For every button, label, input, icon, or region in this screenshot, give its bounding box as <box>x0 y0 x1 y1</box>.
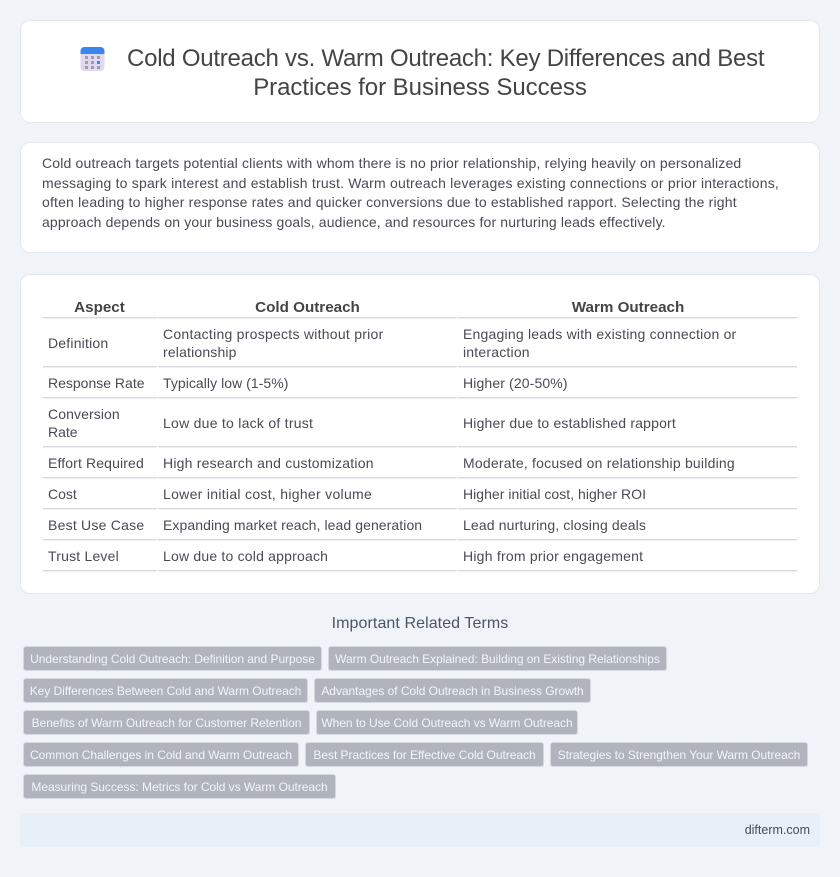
row: trust level: High from prior engagement <box>463 548 643 564</box>
row: best use case <box>48 517 646 533</box>
row: effort required: Effort Required <box>48 455 144 471</box>
panel: introduction <box>20 142 820 253</box>
row: conversion rate <box>48 406 676 440</box>
row: trust level <box>48 548 643 564</box>
row: conversion rate: Higher due to established rapport <box>463 415 676 431</box>
row: definition <box>48 326 736 360</box>
panel: header <box>20 20 820 123</box>
row: response rate: Higher (20-50%) <box>463 375 568 391</box>
intro text: Cold outreach targets potential clients with whom there is no prior relationship, relying heavily on personalized <box>42 155 741 171</box>
row: conversion rate: Low due to lack of trust <box>163 415 313 431</box>
chip <box>316 710 578 735</box>
row: conversion rate: Conversion <box>48 406 120 422</box>
chip <box>23 678 308 703</box>
row: best use case: Expanding market reach, lead generation <box>163 517 422 533</box>
heading: related terms: Important Related Terms <box>332 615 508 632</box>
panel: related term chips <box>23 646 808 799</box>
row: effort required: Moderate, focused on relationship building <box>463 455 735 471</box>
chip: Key Differences Between Cold and Warm Outreach <box>30 684 301 698</box>
table header <box>74 299 684 316</box>
chip: Advantages of Cold Outreach in Business Growth <box>321 684 584 698</box>
row: cost: Cost <box>48 486 77 502</box>
title <box>127 45 764 101</box>
chip: Common Challenges in Cold and Warm Outreach <box>30 748 292 762</box>
row: cost: Lower initial cost, higher volume <box>163 486 372 502</box>
title: Cold Outreach vs. Warm Outreach: Key Differences and Best <box>127 45 764 72</box>
row: trust level: Low due to cold approach <box>163 548 328 564</box>
intro text: messaging to spark interest and establish trust. Warm outreach leverages existing connections or prior interactions, <box>42 175 779 191</box>
chip <box>23 710 310 735</box>
footer bar <box>20 813 820 847</box>
chip: Best Practices for Effective Cold Outreach <box>313 748 536 762</box>
intro text <box>42 155 779 230</box>
row: effort required: High research and customization <box>163 455 374 471</box>
chip: Benefits of Warm Outreach for Customer Retention <box>32 716 301 730</box>
row: definition: Contacting prospects without prior <box>163 326 384 342</box>
row: cost: Higher initial cost, higher ROI <box>463 486 646 502</box>
row: effort required <box>48 455 735 471</box>
icon: calendar <box>80 47 104 71</box>
chip: When to Use Cold Outreach vs Warm Outreach <box>321 716 573 730</box>
row: definition: interaction <box>463 344 530 360</box>
row: response rate <box>48 375 568 391</box>
row: response rate: Typically low (1-5%) <box>163 375 288 391</box>
table header: Cold Outreach <box>255 299 360 316</box>
intro text: approach depends on your business goals, audience, and resources for nurturing leads effectively. <box>42 214 666 230</box>
row: conversion rate: Rate <box>48 424 78 440</box>
chip <box>23 646 322 671</box>
row: response rate: Response Rate <box>48 375 145 391</box>
row: cost <box>48 486 646 502</box>
row: best use case: Lead nurturing, closing deals <box>463 517 646 533</box>
row: trust level: Trust Level <box>48 548 119 564</box>
chip: Measuring Success: Metrics for Cold vs Warm Outreach <box>31 780 328 794</box>
footer text: difterm.com: difterm.com <box>745 823 810 837</box>
table header: Warm Outreach <box>572 299 684 316</box>
chip: Understanding Cold Outreach: Definition and Purpose <box>30 652 315 666</box>
chip <box>550 742 808 767</box>
chip: Warm Outreach Explained: Building on Existing Relationships <box>335 652 660 666</box>
chip <box>305 742 544 767</box>
chip <box>23 742 299 767</box>
chip: Strategies to Strengthen Your Warm Outreach <box>558 748 800 762</box>
row: best use case: Best Use Case <box>48 517 144 533</box>
chip <box>314 678 591 703</box>
chip <box>328 646 667 671</box>
row: definition: relationship <box>163 344 237 360</box>
intro text: often leading to higher response rates and quicker conversions due to established rapport. Selecting the right <box>42 194 737 210</box>
row: definition: Engaging leads with existing connection or <box>463 326 736 342</box>
panel: comparison table <box>20 274 820 594</box>
title: Practices for Business Success <box>253 74 587 101</box>
row: definition: Definition <box>48 335 108 351</box>
chip <box>23 774 336 799</box>
table header: Aspect <box>74 299 125 316</box>
